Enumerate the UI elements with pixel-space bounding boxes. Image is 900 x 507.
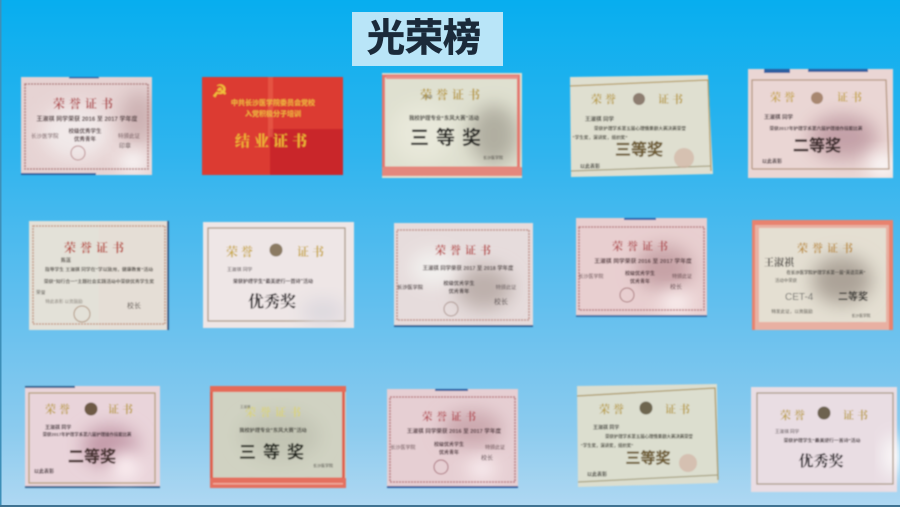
certificate: row 1, third prize gold title: 荣誉 [591, 92, 619, 106]
certificate: row 2, gold title signature [203, 222, 354, 328]
certificate: row 3, pink honour certificate: 特颁此证 [485, 444, 505, 451]
certificate: row 2, honour certificate: 校长 [127, 301, 141, 310]
certificate: row 3, third prize gold title: 证书 [665, 402, 693, 416]
certificate: row 1, honour certificate: 荣誉证书 [53, 96, 117, 111]
certificate: row 1, honour certificate: 印章 [119, 142, 131, 150]
certificate: row 3, pink honour certificate: 优秀青年 [439, 449, 459, 456]
certificate: row 2, CET-4 second prize: 在长沙医学院护理学系第一届“英语竞赛” [786, 269, 866, 276]
certificate: row 1, third prize gold title: 三等奖 [615, 140, 663, 159]
certificate: row 2, honour certificate: 优秀青年 [449, 287, 469, 295]
certificate: row 3, third prize red border: 我校护理专业“东风大赛”活动 [239, 426, 307, 434]
certificate: row 2, honour certificate: 荣誉证书 [64, 240, 128, 255]
certificate: row 2, gold title signature: 优秀奖 [248, 292, 296, 311]
certificate: row 3, third prize red border: 三等奖 [239, 442, 311, 462]
certificate: row 1, second prize pink: 以此表彰 [762, 158, 782, 165]
certificate: row 2, gold title signature: 王淑祺 同学 [227, 266, 253, 273]
certificate: row 1, honour certificate: 优秀青年 [74, 135, 96, 143]
certificate: row 1, honour certificate: 王淑祺 同学荣获 2016 至 2017 学年度 [36, 115, 138, 123]
certificate: row 3, third prize gold title: 荣誉 [599, 402, 627, 416]
certificate: row 2, honour certificate: 特颁此证 [496, 283, 516, 291]
certificate: row 2, pink honour certificate: 长沙医学院 [578, 273, 604, 280]
certificate: row 3, pink honour certificate: 校级优秀学生 [434, 441, 464, 448]
certificate: row 2, honour certificate: 校级优秀学生 [443, 279, 475, 287]
certificate: row 2, honour certificate [394, 223, 533, 327]
certificate: row 2, CET-4 second prize: 二等奖 [838, 290, 868, 303]
certificate: row 1, red party training certificate [202, 77, 343, 175]
certificate: row 3, third prize gold title: 王淑祺 同学 [593, 424, 619, 431]
certificate: row 3, second prize gold title: 王淑祺 同学 [45, 424, 71, 431]
certificate: row 2, honour certificate: 校长 [494, 297, 508, 306]
certificate: row 2, honour certificate [29, 221, 169, 330]
certificate: row 2, pink honour certificate: 特颁此证 [672, 273, 692, 280]
certificate: row 3, second prize gold title: 荣誉 [45, 402, 73, 416]
certificate: row 1, third prize red border: 三等奖 [410, 127, 488, 149]
certificate: row 1, third prize red border [382, 73, 522, 178]
certificate: row 2, pink honour certificate: 校级优秀学生 [625, 270, 655, 277]
certificate: row 2, gold title signature: 荣获护理学生“最美逆行一首诗”活动 [233, 278, 313, 285]
certificate: row 2, pink honour certificate: 校长 [670, 283, 682, 291]
certificate: row 2, CET-4 second prize: 荣誉证书 [797, 241, 857, 255]
certificate: row 2, honour certificate: 陈莲 [61, 257, 71, 264]
certificate: row 1, second prize pink: 荣获2017年护理学系第六届护理操作技能比赛 [770, 125, 863, 132]
certificate: row 3, third prize gold title [577, 384, 718, 487]
certificate: row 1, third prize gold title: 以此表彰 [580, 163, 600, 170]
certificate: row 2, pink honour certificate: 王淑祺 同学荣获 2016 至 2017 学年度 [594, 257, 692, 265]
certificate: row 1, third prize red border: 荣誉证书 [420, 87, 484, 102]
certificate: row 2, pink honour certificate: 优秀青年 [630, 278, 650, 285]
certificate: row 3, gold title signature: 荣誉 [780, 408, 808, 422]
certificate: row 3, second prize gold title: 以此表彰 [34, 468, 54, 475]
certificate: row 2, CET-4 second prize: 王淑祺 [764, 256, 795, 269]
certificate: row 1, third prize gold title: 王淑祺 同学 [585, 115, 615, 123]
certificate: row 1, red party training certificate: 入党积极分子培训 [245, 109, 301, 118]
certificate: row 2, honour certificate: 荣誉 [36, 289, 46, 296]
certificate: row 3, gold title signature: 荣获护理学生“最美逆行一首诗”活动 [784, 437, 861, 444]
certificate: row 2, pink honour certificate: 荣誉证书 [612, 239, 672, 253]
certificate: row 3, gold title signature [751, 387, 900, 492]
certificate: row 2, honour certificate: 指导学生 王淑祺 同学在“学以致用，健康教育”活动 [45, 266, 153, 273]
certificate: row 1, second prize pink: 荣誉 [770, 90, 798, 104]
certificate: row 3, second prize gold title [25, 386, 160, 488]
certificate: row 1, honour certificate: 长沙医学院 [31, 132, 59, 140]
certificate: row 3, gold title signature: 王淑祺 同学 [775, 428, 800, 435]
certificate: row 2, CET-4 second prize: 长沙医学院 [852, 313, 871, 318]
certificate: row 1, second prize pink: 二等奖 [793, 136, 841, 155]
certificate: row 1, red party training certificate: 结业证书 [235, 132, 311, 150]
certificate: row 1, third prize gold title: 荣获护理学系第五届心理情景剧大赛决赛荣誉 [594, 125, 686, 132]
certificate: row 3, pink honour certificate: 校长 [481, 454, 493, 462]
certificate: row 3, third prize red border: 荣誉证书 [245, 405, 305, 419]
certificate: row 3, second prize gold title: 荣获2017年护理学系第六届护理操作技能比赛 [43, 431, 132, 438]
certificate: row 3, third prize gold title: 三等奖 [625, 449, 671, 467]
title: 光荣榜 [367, 18, 481, 60]
certificate: row 3, third prize gold title: “学生奖，演讲奖，组织奖” [581, 442, 633, 449]
certificate: row 2, honour certificate: 特此表彰 以资鼓励 [45, 298, 83, 305]
certificate: row 3, third prize red border: 长沙医学院 [313, 462, 333, 468]
certificate: row 1, third prize red border: 长沙医学院 [483, 154, 503, 160]
certificate: row 1, third prize red border: 我校护理专业“东风大赛”活动 [409, 114, 480, 122]
certificate: row 2, CET-4 second prize: 特发此证，以资鼓励 [771, 308, 813, 315]
certificate: row 2, CET-4 second prize: CET-4 [785, 292, 814, 303]
title [352, 12, 503, 66]
certificate: row 1, third prize gold title [570, 75, 713, 177]
certificate: row 3, second prize gold title: 证书 [108, 402, 136, 416]
certificate: row 2, honour certificate: 荣誉证书 [435, 243, 495, 257]
certificate: row 3, third prize gold title: 荣获护理学系第五届心理情景剧大赛决赛荣誉 [605, 433, 694, 440]
certificate: row 2, pink honour certificate [576, 218, 707, 317]
certificate: row 2, honour certificate: 王淑祺 同学荣获 2017 至 2018 学年度 [423, 264, 514, 272]
certificate: row 3, pink honour certificate [387, 389, 518, 488]
certificate: row 3, gold title signature: 证书 [843, 408, 871, 422]
certificate: row 1, second prize pink: 王淑祺 同学 [764, 113, 794, 121]
certificate: row 1, red party training certificate: 中共长沙医学院委员会党校 [231, 98, 315, 107]
certificate: row 1, third prize gold title: 证书 [658, 92, 686, 106]
certificate: row 3, second prize gold title: 二等奖 [68, 447, 116, 466]
certificate: row 3, pink honour certificate: 王淑祺 同学荣获 2016 至 2017 学年度 [407, 427, 501, 435]
certificate: row 3, pink honour certificate: 荣誉证书 [422, 410, 480, 423]
certificate: row 1, red party training certificate: ☭ [212, 82, 227, 101]
certificate: row 2, CET-4 second prize [752, 220, 893, 330]
certificate: row 1, third prize gold title: “学生奖，演讲奖，组织奖” [572, 134, 628, 141]
certificate: row 1, honour certificate: 校级优秀学生 [68, 127, 102, 135]
certificate: row 3, third prize gold title: 以此表彰 [587, 471, 607, 478]
certificate: row 1, honour certificate: 特颁此证 [118, 132, 140, 140]
certificate: row 1, second prize pink: 证书 [837, 90, 865, 104]
certificate: row 3, pink honour certificate: 长沙医学院 [390, 444, 416, 451]
certificate: row 3, third prize red border [210, 386, 346, 488]
certificate: row 1, third prize red border: 王淑祺 [422, 94, 433, 99]
certificate: row 1, second prize pink [748, 69, 897, 178]
certificate: row 2, gold title signature: 荣誉 [226, 244, 256, 259]
certificate: row 2, gold title signature: 证书 [297, 244, 327, 259]
certificate: row 2, honour certificate: 荣获“知行合一”主题社会实践活动中荣获优秀学生奖 [44, 278, 154, 285]
certificate: row 3, gold title signature: 优秀奖 [798, 452, 844, 470]
certificate: row 2, CET-4 second prize: 活动中荣获 [775, 277, 798, 284]
certificate: row 3, third prize red border: 王淑祺 [240, 404, 251, 409]
certificate: row 2, honour certificate: 长沙医学院 [397, 283, 424, 291]
certificate: row 1, honour certificate [21, 77, 157, 175]
